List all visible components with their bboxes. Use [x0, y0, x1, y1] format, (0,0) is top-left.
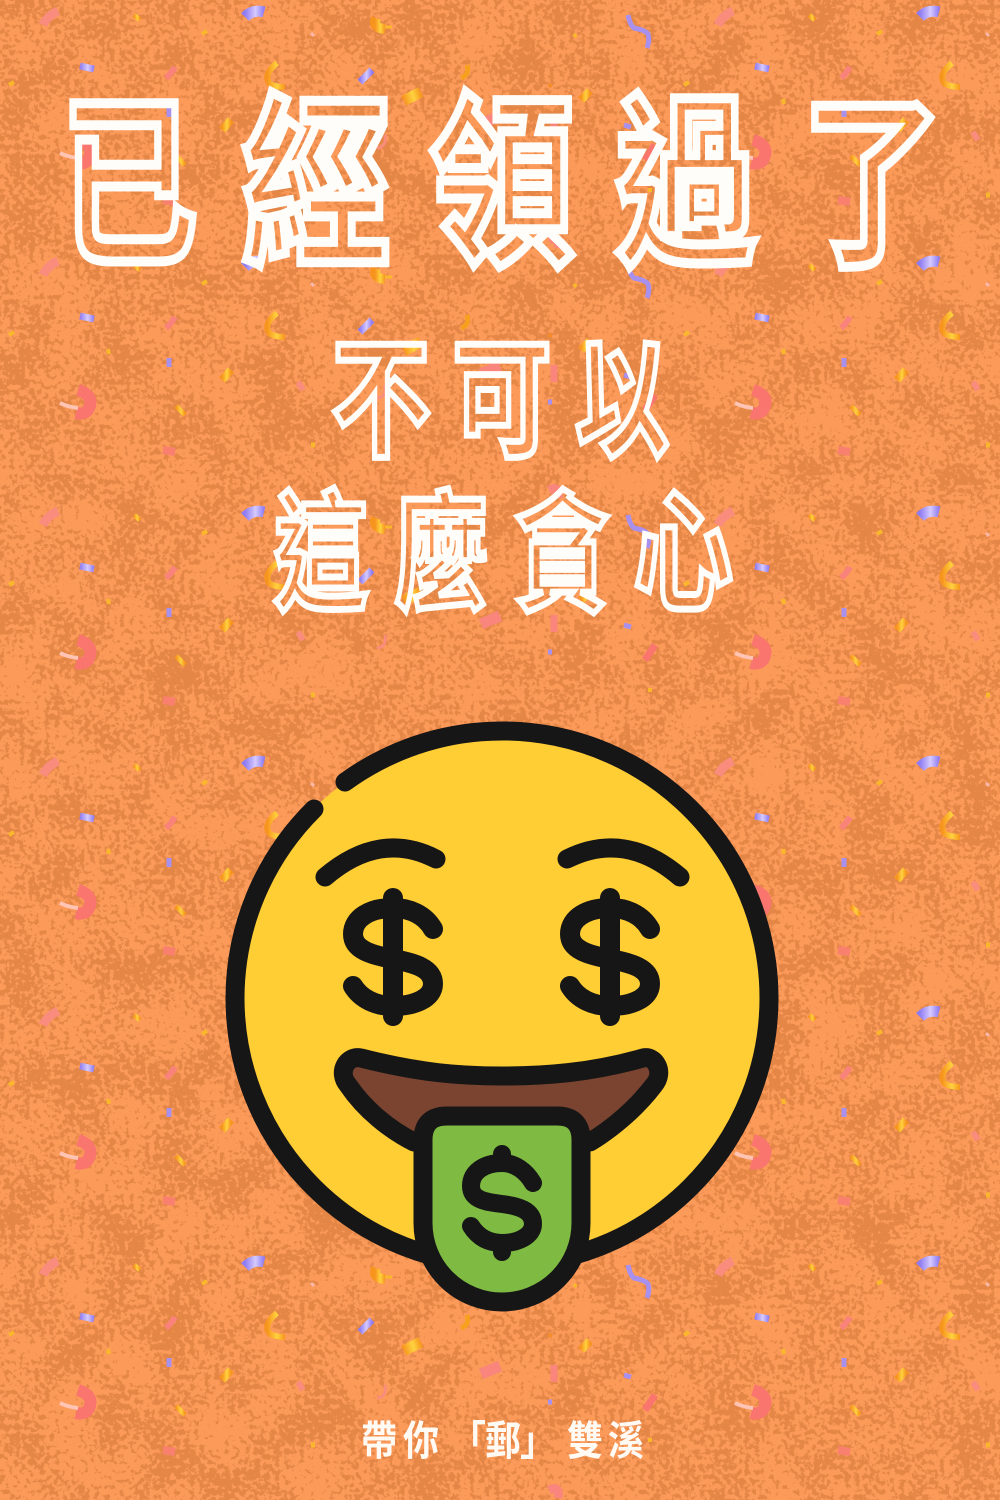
- money tongue: [423, 1116, 581, 1302]
- title: outlined headline: 已: [61, 84, 197, 290]
- subtitle line 2: 麼: [394, 483, 488, 629]
- footer credit: 」: [520, 1419, 556, 1465]
- left dollar eye: [353, 898, 433, 1016]
- title: outlined headline: 了: [802, 82, 942, 289]
- right dollar eye: [570, 898, 650, 1016]
- subtitle line 2: 貪: [515, 483, 609, 629]
- footer credit: 帶: [361, 1419, 397, 1465]
- title: outlined headline: 過: [616, 82, 756, 289]
- icon: money-mouth face emoji: [235, 731, 769, 1302]
- title: outlined headline: 經: [242, 83, 390, 290]
- title: outlined headline: [61, 82, 942, 290]
- subtitle line 1: [332, 329, 669, 475]
- footer credit: 郵: [485, 1419, 521, 1465]
- subtitle line 2: [274, 483, 732, 629]
- subtitle line 1: 以: [575, 329, 669, 475]
- footer credit: 雙: [567, 1419, 603, 1465]
- footer credit: 溪: [608, 1419, 644, 1465]
- title: outlined headline: 領: [430, 84, 574, 290]
- face: [235, 731, 769, 1265]
- footer credit: [361, 1419, 644, 1465]
- subtitle line 1: 可: [453, 329, 551, 474]
- subtitle line 2: 心: [634, 483, 732, 628]
- left eyebrow: [325, 848, 436, 877]
- footer credit: 「: [450, 1419, 486, 1465]
- face outline with gap: [235, 731, 769, 1265]
- mouth: [343, 1058, 659, 1142]
- tongue dollar sign: [471, 1154, 533, 1252]
- right eyebrow: [567, 848, 680, 877]
- subtitle line 1: 不: [332, 329, 430, 474]
- subtitle line 2: 這: [274, 483, 368, 629]
- footer credit: 你: [403, 1419, 439, 1465]
